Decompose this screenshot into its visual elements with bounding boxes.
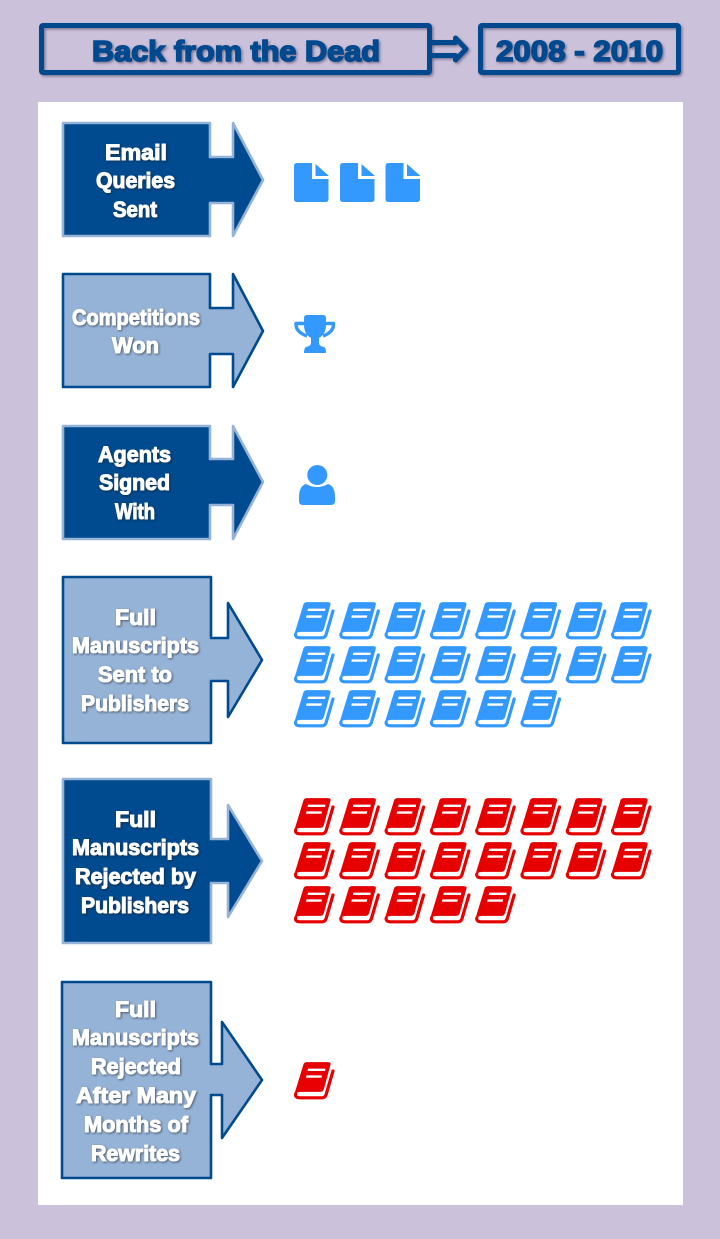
callout: Full Manuscripts Rejected After Many Months of Rewrites [62, 982, 262, 1178]
arrow label: Months of [84, 1112, 189, 1137]
arrow label: Manuscripts [72, 633, 199, 658]
arrow label [72, 997, 199, 1166]
arrow shape [63, 426, 263, 539]
arrow shape [63, 274, 263, 387]
panel: white content area [38, 102, 683, 1205]
arrow label: Rejected [91, 1054, 181, 1079]
icon: trophy [296, 315, 334, 353]
icons: three documents [294, 163, 420, 202]
icon: person [299, 465, 335, 505]
arrow label: Rewrites [91, 1141, 180, 1166]
arrow shape [63, 779, 262, 943]
arrow label: Rejected by [75, 864, 197, 889]
arrow label: With [115, 499, 155, 524]
callout: Full Manuscripts Sent to Publishers [63, 577, 262, 743]
arrow: title to dates [431, 38, 466, 60]
header: title box [42, 26, 430, 72]
arrow shape [63, 123, 263, 236]
icons: 21 red books [294, 798, 650, 922]
icons: 22 blue books [294, 602, 650, 726]
arrow label [72, 305, 200, 358]
arrow label: Manuscripts [72, 835, 199, 860]
arrow label [72, 807, 199, 918]
arrow label: Publishers [81, 691, 189, 716]
callout: Competitions Won [63, 274, 263, 387]
arrow label: Signed [99, 470, 170, 495]
arrow label: Full [115, 605, 156, 630]
arrow label: Competitions [72, 305, 200, 330]
callout: Agents Signed With [63, 426, 263, 539]
title frame [42, 26, 430, 72]
arrow label [96, 140, 175, 222]
arrow shape [62, 982, 262, 1178]
header: date box [480, 26, 678, 72]
arrow label: Queries [96, 168, 175, 193]
arrow label: Sent to [98, 662, 172, 687]
arrow label [72, 605, 199, 716]
date frame [480, 26, 678, 72]
arrow label [98, 442, 171, 524]
arrow label: Full [115, 997, 156, 1022]
arrow label: Publishers [81, 893, 189, 918]
arrow label: After Many [76, 1083, 197, 1108]
callout: Full Manuscripts Rejected by Publishers [63, 779, 262, 943]
arrow label: Sent [113, 197, 158, 222]
arrow label: Won [112, 333, 159, 358]
title: Back from the Dead [92, 36, 380, 68]
arrow label: Agents [98, 442, 171, 467]
arrow label: Email [105, 140, 167, 165]
icon: single red book [294, 1062, 333, 1098]
date range: 2008 - 2010 [496, 36, 663, 68]
callout: Email Queries Sent [63, 123, 263, 236]
arrow label: Full [115, 807, 156, 832]
arrow shape [63, 577, 262, 743]
arrow label: Manuscripts [72, 1025, 199, 1050]
